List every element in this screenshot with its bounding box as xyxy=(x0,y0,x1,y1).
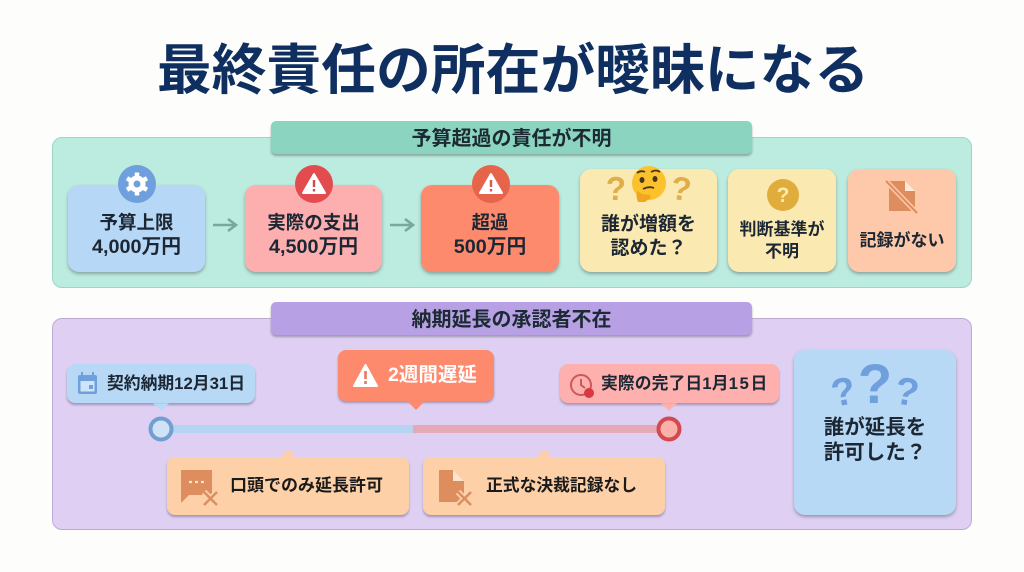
card: who allowed extension: 誰が延長を xyxy=(824,416,926,439)
heading: budget overrun xyxy=(271,121,752,154)
callout: no formal record xyxy=(422,449,666,518)
heading: deadline extension: 納期延長の承認者不在 xyxy=(412,309,612,331)
timeline xyxy=(148,416,682,442)
icon: question circle: ? xyxy=(777,184,789,207)
callout: contract deadline: 契約納期12月31日 xyxy=(107,374,245,393)
card: budget cap xyxy=(68,185,205,272)
title: 最終責任の所在が曖昧になる xyxy=(157,39,869,101)
marker: contract date xyxy=(150,418,172,440)
card: no records xyxy=(848,169,956,272)
icon: question marks: ? xyxy=(891,369,922,416)
heading: budget overrun: 予算超過の責任が不明 xyxy=(412,128,612,150)
callout: actual completion: 実際の完了日1月1 5 日 xyxy=(601,374,767,393)
card: overrun: 超過 xyxy=(471,212,508,233)
callout: no formal record: 正式な決裁記録なし xyxy=(486,476,637,495)
card: actual spend xyxy=(245,185,382,272)
icon: thinking face: ? xyxy=(669,169,694,208)
card: who approved increase xyxy=(580,169,717,272)
card: unclear criteria xyxy=(728,169,836,272)
icon: warning red xyxy=(295,165,333,203)
card: actual spend: 4,500万円 xyxy=(269,236,358,258)
card: budget cap: 予算上限 xyxy=(99,212,174,233)
callout: verbal approval only: 口頭でのみ延長許可 xyxy=(230,476,383,495)
card: overrun: 500万円 xyxy=(454,236,526,258)
icon: thinking face xyxy=(606,166,694,208)
card: unclear criteria: 不明 xyxy=(765,242,799,261)
callout: actual completion xyxy=(558,364,780,411)
panel: budget overrun xyxy=(52,137,972,288)
icon: gear xyxy=(118,165,156,203)
callout: two week delay: 2週間遅延 xyxy=(388,364,477,386)
card: who approved increase: 認めた？ xyxy=(610,238,686,259)
icon: warning orange xyxy=(472,165,510,203)
icon: question marks: ? xyxy=(858,352,892,415)
icon: thinking face: ? xyxy=(606,170,626,207)
card: no records: 記録がない xyxy=(860,231,944,250)
callout: two week delay xyxy=(336,350,496,410)
icon: question circle xyxy=(767,179,799,211)
heading: deadline extension xyxy=(271,302,752,335)
icon: question marks xyxy=(828,352,922,416)
arrow: cap to actual xyxy=(213,218,238,232)
panel: deadline extension xyxy=(52,318,972,530)
icon: crossed document xyxy=(885,180,918,214)
card: budget cap: 4,000万円 xyxy=(92,236,181,258)
card: who approved increase: 誰が増額を xyxy=(601,214,696,235)
callout: verbal approval only xyxy=(166,449,410,518)
card: overrun xyxy=(421,185,559,272)
card: unclear criteria: 判断基準が xyxy=(740,220,824,239)
card: who allowed extension xyxy=(794,350,956,515)
callout: contract deadline xyxy=(66,364,256,411)
icon: question marks: ? xyxy=(828,369,859,416)
marker: actual date xyxy=(658,418,680,440)
arrow: actual to overrun xyxy=(390,218,415,232)
card: who allowed extension: 許可した？ xyxy=(824,441,926,464)
card: actual spend: 実際の支出 xyxy=(267,212,360,233)
